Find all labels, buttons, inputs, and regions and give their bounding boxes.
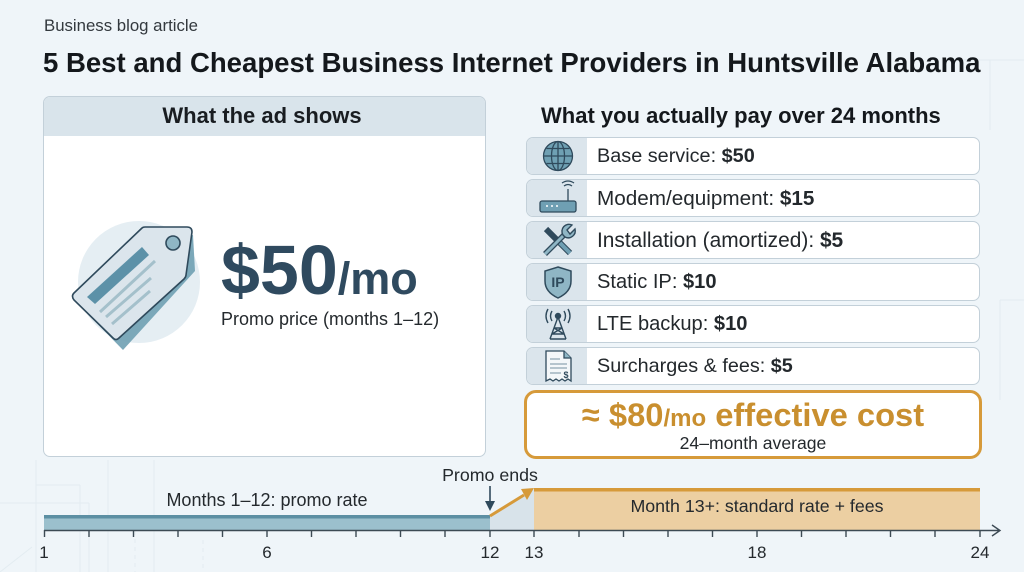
timeline chart — [39, 465, 1002, 562]
icon: tools — [527, 222, 587, 258]
panel heading: what the ad shows: What the ad shows — [162, 103, 362, 128]
title: 5 Best and Cheapest Business Internet Providers in Huntsville Alabama — [43, 47, 980, 78]
promo caption: Promo price (months 1–12) — [221, 309, 439, 329]
axis labels: 1 — [39, 543, 49, 562]
icon: receipt: $ — [563, 370, 569, 380]
label: standard rate: Month 13+: standard rate + fees — [630, 496, 884, 516]
icon: price tag — [72, 221, 200, 350]
cost row: base service — [526, 137, 980, 175]
axis — [44, 525, 1000, 537]
label: base service: Base service: $50 — [597, 145, 755, 167]
icon: receipt — [527, 348, 587, 384]
eyebrow label: Business blog article — [44, 16, 198, 35]
icon: globe — [527, 138, 587, 174]
effective cost figure: ≈ $80/mo effective cost — [582, 396, 924, 433]
label: installation: Installation (amortized): $5 — [597, 229, 843, 252]
cost row: surcharges — [526, 347, 980, 385]
label: LTE backup: LTE backup: $10 — [597, 313, 747, 335]
icon: cell tower — [527, 306, 587, 342]
axis labels: 12 — [481, 543, 499, 562]
promo bar — [44, 515, 490, 530]
label: static IP: Static IP: $10 — [597, 271, 717, 293]
axis labels: 13 — [525, 543, 543, 562]
icon: router — [527, 180, 587, 216]
cost row: modem — [526, 179, 980, 217]
promo price: $50/mo — [221, 231, 418, 309]
heading: what you actually pay: What you actually pay over 24 months — [541, 103, 941, 128]
arrow: price rise — [490, 488, 534, 516]
transition wedge — [490, 489, 534, 530]
standard rate bar — [534, 488, 980, 530]
axis labels: 24 — [971, 543, 989, 562]
panel heading: what the ad shows — [44, 97, 485, 136]
panel: what the ad shows — [43, 96, 486, 457]
label: promo ends: Promo ends — [442, 465, 538, 485]
callout: effective cost — [524, 390, 982, 459]
axis labels: 18 — [748, 543, 766, 562]
effective cost caption: 24–month average — [680, 433, 826, 453]
icon: IP shield: IP — [551, 274, 565, 290]
cost row: installation — [526, 221, 980, 259]
cost row: LTE backup — [526, 305, 980, 343]
arrow: promo ends — [485, 486, 495, 511]
axis labels: 6 — [262, 543, 272, 562]
label: modem: Modem/equipment: $15 — [597, 187, 814, 210]
cost row: static IP — [526, 263, 980, 301]
label: promo rate: Months 1–12: promo rate — [166, 490, 368, 510]
icon: IP shield — [527, 264, 587, 300]
label: surcharges: Surcharges & fees: $5 — [597, 355, 793, 377]
axis labels — [39, 543, 989, 562]
